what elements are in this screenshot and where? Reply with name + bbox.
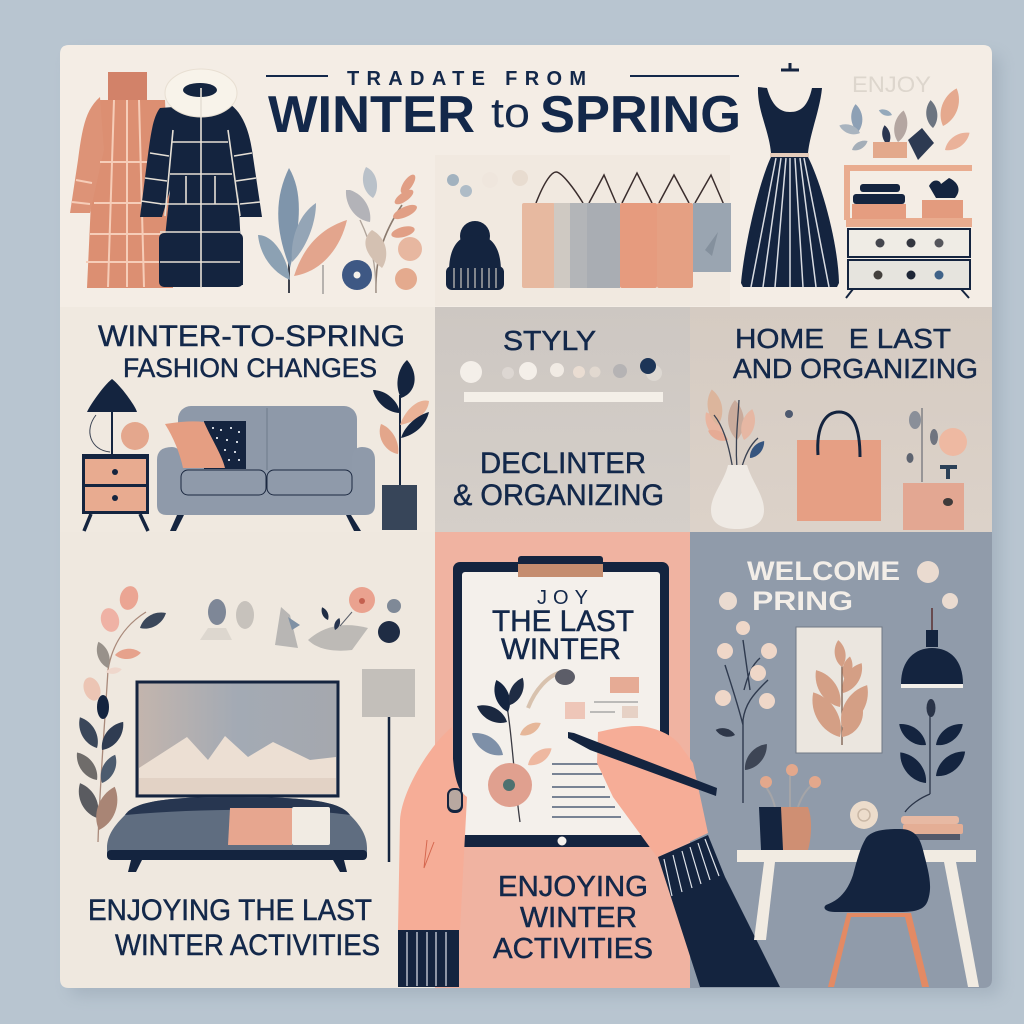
text: welcome spring heading — [747, 556, 900, 616]
icon: pen — [568, 732, 717, 796]
icon: salmon winter coat — [70, 72, 173, 288]
text: fashion changes heading: WINTER-TO-SPRING — [98, 320, 405, 353]
icon: framed leaf poster — [796, 627, 882, 753]
icon: clipboard — [453, 556, 669, 847]
panel: welcome spring — [690, 532, 992, 988]
icon: donut ornament — [121, 422, 149, 450]
icon: clipboard: WINTER — [501, 633, 621, 666]
heading: title: TRADATE FROM — [347, 68, 586, 90]
icon: pendant lamp — [901, 608, 963, 688]
text: fashion changes heading: FASHION CHANGES — [123, 353, 377, 383]
icon: salmon shopping bag — [797, 412, 881, 521]
heading: title: WINTER — [268, 86, 475, 144]
text: enjoying winter activities heading: ACTIVITIES — [493, 933, 653, 965]
icon: shelf and dresser — [844, 165, 972, 298]
panel: fashion changes — [60, 307, 435, 532]
text: declutter heading: & ORGANIZING — [453, 479, 664, 512]
icon: table lamp — [87, 379, 137, 454]
text: enjoying winter activities heading: ENJOYING — [498, 871, 648, 903]
icon: grey sofa — [157, 406, 375, 531]
icon: floor lamp — [362, 669, 415, 862]
icon: plant arrangement: ENJOY — [852, 72, 931, 97]
icon: clipboard checklist — [552, 677, 639, 817]
icon: desk — [737, 850, 979, 987]
text: last winter activities heading: ENJOYING THE LAST — [88, 894, 372, 927]
icon: row of round swatches — [460, 358, 662, 383]
panel: journaling — [435, 532, 690, 988]
icon: clipboard: JOY — [537, 587, 588, 609]
icon: navy dress — [741, 63, 839, 287]
icon: clipboard botanical — [468, 669, 575, 822]
text: enjoying winter activities heading — [493, 871, 653, 965]
icon: vase with stems — [701, 388, 767, 529]
panel: top banner — [60, 45, 992, 307]
text: style heading: STYLY — [503, 325, 596, 356]
text: last winter activities heading: WINTER ACTIVITIES — [115, 929, 380, 962]
text: welcome spring heading: WELCOME — [747, 556, 900, 586]
heading: title: to — [491, 89, 530, 136]
icon: navy chair — [824, 829, 930, 987]
icon: faded decor row — [200, 587, 401, 651]
panel: shopping backdrop — [435, 155, 730, 306]
panel: declutter and organizing — [435, 307, 690, 532]
icon: shopping bags — [522, 172, 731, 288]
text: welcome spring heading: PRING — [752, 586, 853, 616]
panel: last winter activities — [60, 532, 435, 988]
icon: faded dots — [447, 170, 528, 197]
text: declutter heading: DECLINTER — [480, 447, 646, 480]
icon: navy parka — [140, 69, 262, 288]
icon: plant arrangement — [838, 72, 973, 160]
icon: wall tv with mountains — [137, 682, 338, 796]
icon: left hand — [398, 727, 467, 930]
icon: white shelf bar — [464, 392, 663, 402]
heading: title: SPRING — [540, 86, 741, 144]
icon: faded plant box — [785, 408, 967, 530]
icon: low bench sofa — [107, 797, 367, 872]
panel: home and organizing — [690, 307, 992, 532]
icon: clipboard: THE LAST — [492, 605, 634, 638]
text: enjoying winter activities heading: WINTER — [520, 902, 637, 934]
icon: two-tone vase — [759, 764, 821, 850]
icon: botanical cluster — [258, 167, 422, 294]
icon: floating blossoms — [719, 561, 958, 610]
icon: right arm and sleeve — [597, 726, 780, 987]
icon: navy plant — [894, 699, 970, 812]
icon: blossom branch — [715, 621, 777, 803]
icon: nightstand — [82, 454, 149, 531]
icon: beanie hat — [446, 221, 504, 290]
text: declutter heading — [453, 447, 664, 512]
icon: left sleeve — [398, 930, 459, 987]
text: fashion changes heading — [98, 320, 405, 383]
text: home heading: HOME E LAST — [735, 323, 951, 354]
icon: branch with leaves — [72, 584, 169, 842]
icon: potted plant — [373, 360, 429, 530]
text: last winter activities heading — [88, 894, 380, 962]
text: home heading: AND ORGANIZING — [733, 353, 978, 384]
icon: stack of books — [901, 816, 963, 840]
text: home heading — [733, 323, 978, 384]
heading: title — [266, 68, 741, 144]
icon: spiral ornament — [850, 801, 878, 829]
